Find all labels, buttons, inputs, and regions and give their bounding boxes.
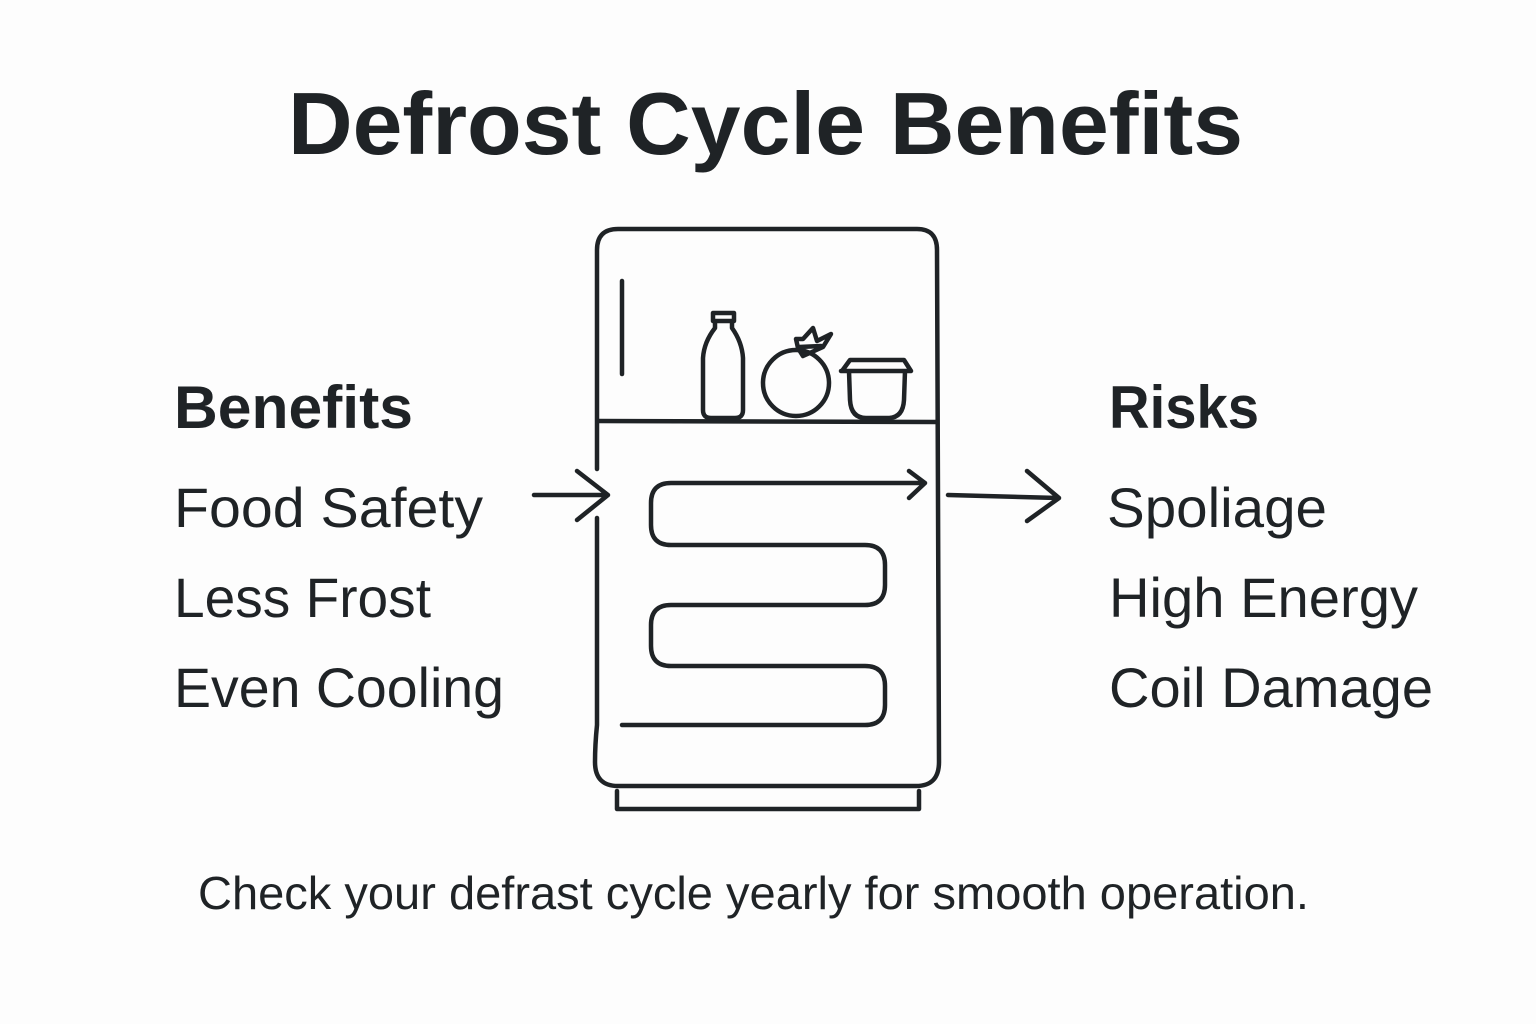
icon: bottle — [703, 313, 743, 418]
risk: coil damage: Coil Damage — [1109, 656, 1433, 719]
benefit: food safety: Food Safety — [174, 476, 483, 539]
fridge shelf — [598, 421, 937, 422]
arrow: into fridge — [534, 471, 608, 520]
panel: benefits — [174, 374, 504, 719]
benefit: even cooling: Even Cooling — [174, 656, 504, 719]
refrigerator illustration — [595, 229, 939, 809]
fridge body — [595, 229, 939, 786]
heading: risks: Risks — [1109, 374, 1259, 441]
title: Defrost Cycle Benefits — [288, 74, 1243, 173]
footer note: Check your defrast cycle yearly for smooth operation. — [198, 867, 1309, 919]
icon: apple — [763, 328, 831, 416]
risk: spoilage: Spoliage — [1107, 476, 1327, 539]
coil with arrow — [622, 471, 925, 725]
fridge handle — [620, 281, 624, 374]
fridge base — [617, 791, 919, 809]
heading: benefits: Benefits — [174, 374, 413, 441]
icon: cup — [841, 360, 911, 418]
risk: high energy: High Energy — [1109, 566, 1418, 629]
benefit: less frost: Less Frost — [174, 566, 431, 629]
arrow: out of fridge — [948, 471, 1059, 521]
panel: risks — [1107, 374, 1433, 719]
